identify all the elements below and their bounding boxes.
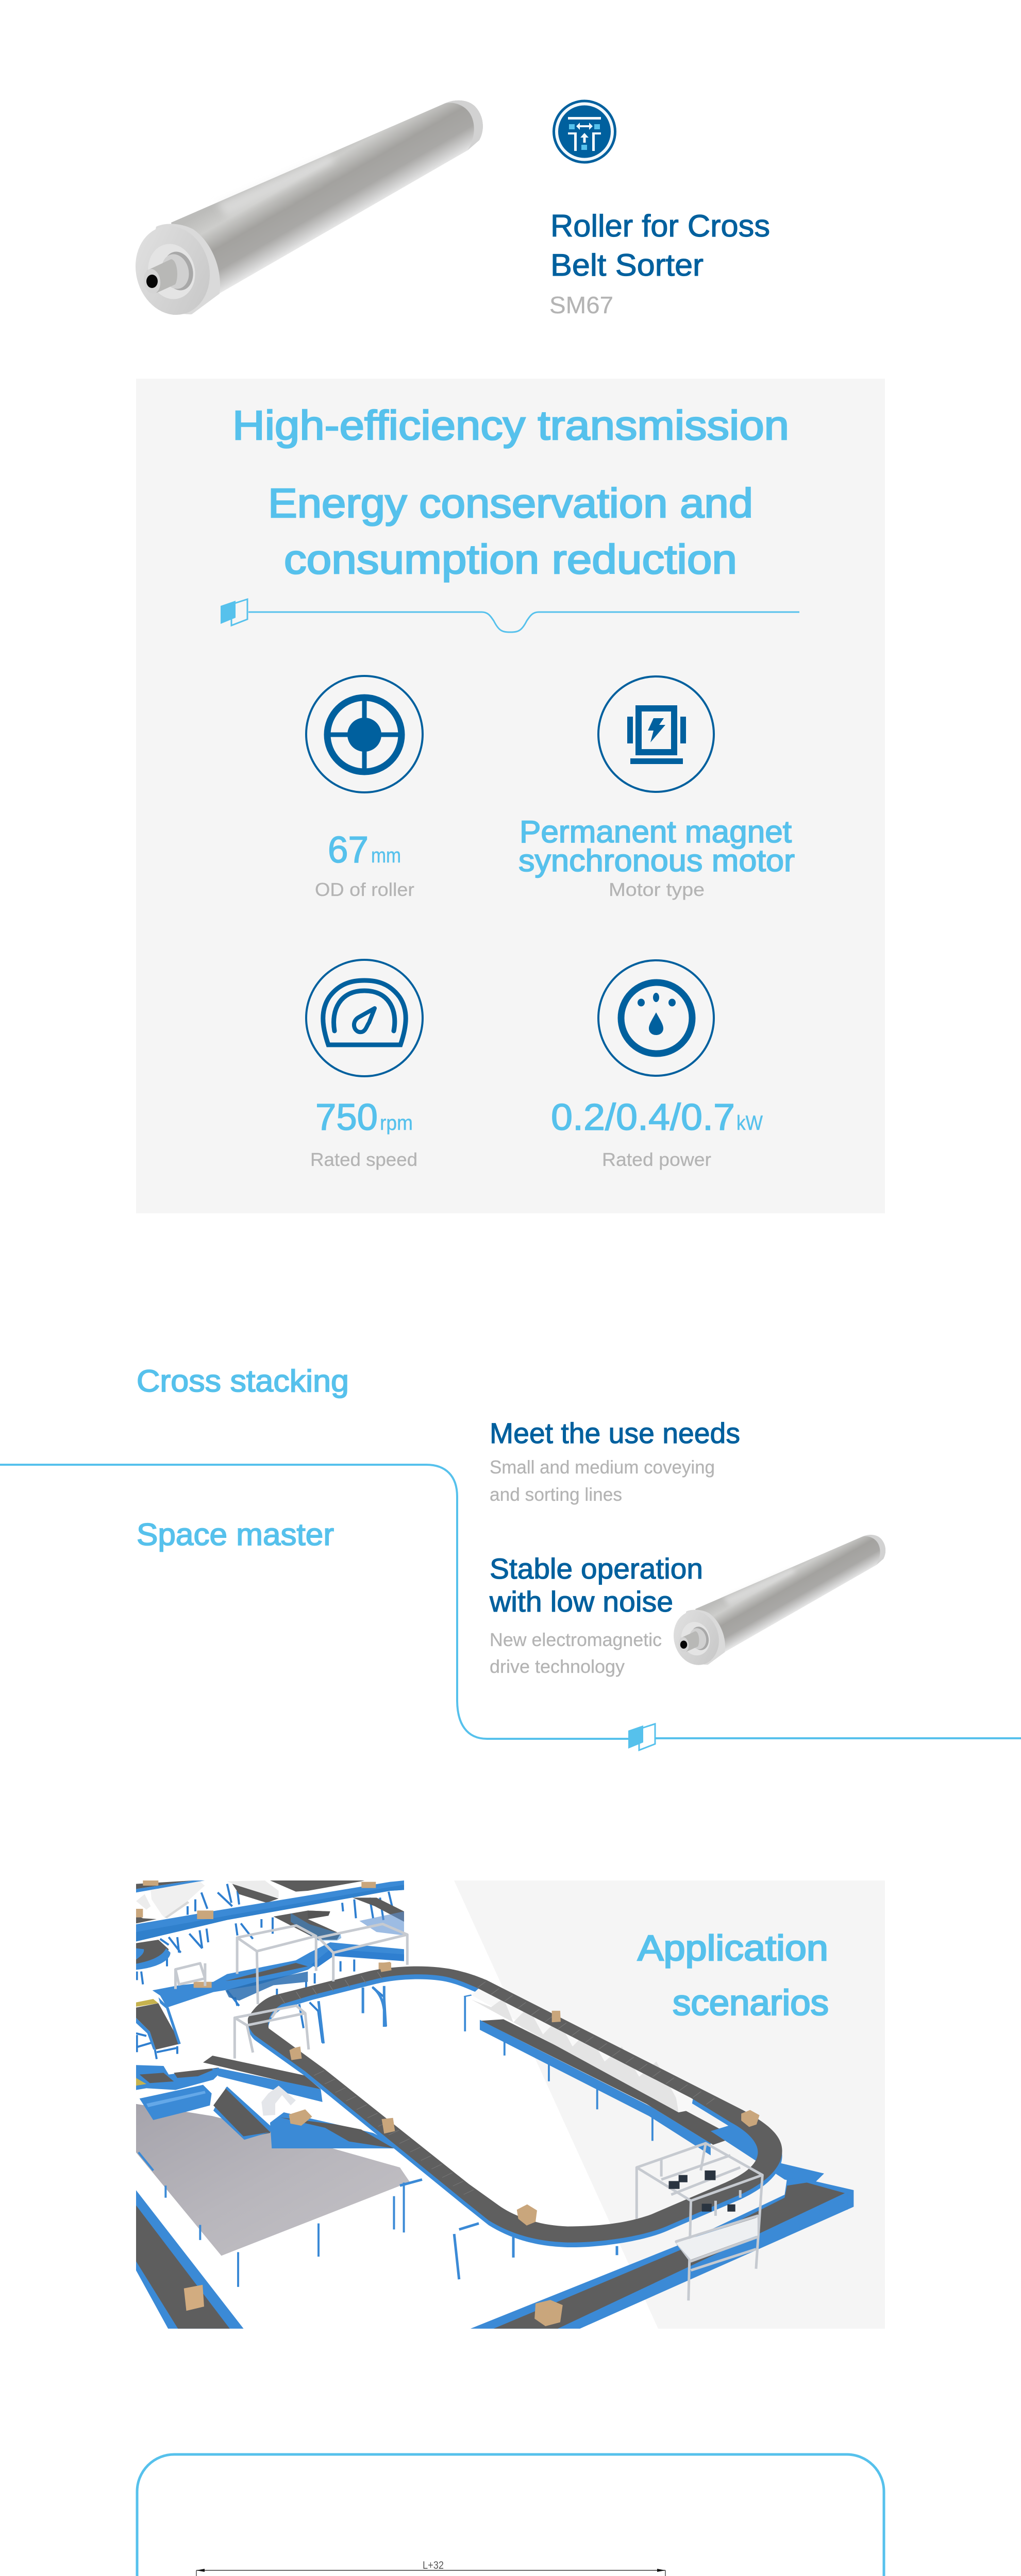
illustration: warehouse floor <box>136 2104 410 2287</box>
heading: energy conservation: consumption reduction <box>284 536 737 582</box>
icon: section marker <box>628 1724 655 1750</box>
heading: energy conservation <box>268 480 753 582</box>
feature: meet the use needs: Small and medium coveying <box>490 1456 715 1478</box>
value: permanent magnet synchronous motor: Permanent magnet <box>520 815 792 849</box>
camera gantry <box>235 2006 762 2300</box>
icon: cross belt sorter badge <box>553 100 616 164</box>
connector line <box>0 1465 1021 1739</box>
product model: SM67 <box>549 292 613 318</box>
icon: roller cross-section <box>306 676 423 792</box>
feature: meet the use needs: and sorting lines <box>490 1484 622 1505</box>
loop belt <box>248 1967 782 2243</box>
heading: space master: Space master <box>137 1517 334 1552</box>
icon: motor with bolt <box>598 676 714 792</box>
value: 67 mm <box>328 829 401 871</box>
value: 67 mm: 67 <box>328 829 369 871</box>
feature: meet the use needs <box>490 1417 740 1505</box>
spec: outer diameter <box>306 676 423 900</box>
heading: cross stacking: Cross stacking <box>137 1364 349 1398</box>
spec: motor type <box>518 676 795 900</box>
heading: energy conservation: Energy conservation and <box>268 480 753 526</box>
dimension labels: L+32 <box>423 2560 444 2571</box>
heading: high-efficiency transmission: High-efficiency transmission <box>232 402 789 448</box>
belt slats <box>281 1975 715 2192</box>
icon: power gauge <box>598 960 714 1076</box>
value: 750 rpm <box>315 1097 413 1138</box>
label: rated speed: Rated speed <box>310 1149 417 1170</box>
white chutes <box>472 1986 693 2112</box>
product hero roller <box>126 100 483 323</box>
heading: application scenarios: Application <box>638 1928 828 1968</box>
dimension labels <box>149 2560 472 2576</box>
heading: application scenarios: scenarios <box>673 1982 829 2023</box>
label: motor type: Motor type <box>609 879 705 900</box>
illustration: upper conveyors <box>136 1880 404 2148</box>
label: rated power: Rated power <box>602 1149 711 1170</box>
value: 750 rpm: 750 <box>315 1097 378 1138</box>
panel: dimension drawing <box>137 2454 884 2576</box>
upper gantries <box>175 1924 407 2004</box>
icon: speedometer <box>306 960 423 1076</box>
lower conveyor under chutes <box>464 1995 824 2185</box>
label: OD of roller: OD of roller <box>315 879 414 900</box>
product title: Roller for Cross <box>550 209 770 243</box>
drawing: roller side view <box>149 2560 665 2576</box>
product title <box>550 209 770 282</box>
loop supports <box>319 1986 617 2279</box>
feature: stable operation <box>489 1552 703 1677</box>
loop belt underside <box>248 1971 782 2247</box>
section: features <box>0 1364 1021 1750</box>
bottom left conveyor <box>136 2190 244 2329</box>
heading: application scenarios <box>638 1928 829 2023</box>
value: permanent magnet synchronous motor <box>518 815 795 878</box>
spec: rated speed <box>306 960 423 1170</box>
icon: section marker <box>221 599 247 625</box>
product title: Belt Sorter <box>550 248 704 282</box>
spec: rated power <box>551 960 763 1170</box>
product roller small <box>668 1535 885 1670</box>
feature: meet the use needs: Meet the use needs <box>490 1417 740 1449</box>
feature: stable operation: with low noise <box>489 1585 673 1618</box>
dimension lines <box>168 2570 665 2576</box>
parcels on belt <box>289 1962 760 2226</box>
panel: key specifications <box>136 379 885 1213</box>
feature: stable operation: New electromagnetic <box>490 1629 662 1650</box>
value: 0.2/0.4/0.7 kW: kW <box>737 1112 763 1134</box>
value: 0.2/0.4/0.7 kW: 0.2/0.4/0.7 <box>551 1097 735 1138</box>
value: 67 mm: mm <box>371 844 401 867</box>
feature: stable operation: drive technology <box>490 1656 625 1677</box>
value: 750 rpm: rpm <box>380 1112 413 1134</box>
illustration: cross belt sorter loop <box>136 1924 853 2329</box>
lower right conveyor <box>471 2178 853 2329</box>
feature: stable operation: Stable operation <box>490 1552 703 1585</box>
panel: application scenarios <box>136 1880 885 2329</box>
value: permanent magnet synchronous motor: synchronous motor <box>518 843 795 878</box>
